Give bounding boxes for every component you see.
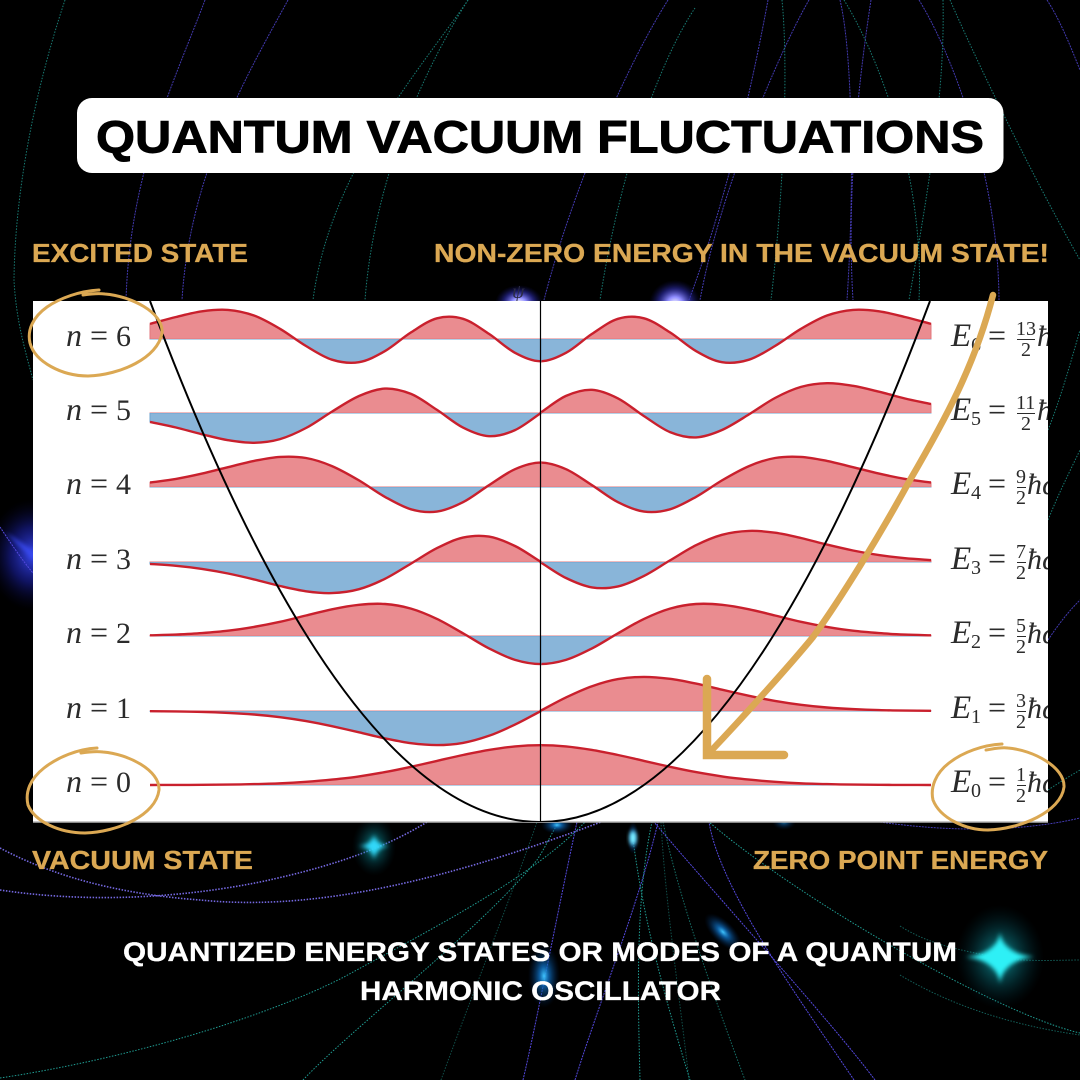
label: non-zero energy: NON-ZERO ENERGY IN THE VACUUM STATE! xyxy=(434,238,1049,268)
energy labels right: ħω xyxy=(1027,766,1063,799)
energy labels right: = xyxy=(988,391,1006,427)
energy labels right: = xyxy=(988,540,1006,576)
level labels left: n xyxy=(66,317,82,353)
level labels left: = xyxy=(90,540,108,576)
level labels left: 4 xyxy=(116,468,131,501)
energy labels right: 11 xyxy=(1016,392,1035,414)
level labels left: = xyxy=(90,763,108,799)
level labels left: n xyxy=(66,465,82,501)
energy labels right: 1 xyxy=(971,706,981,728)
hand-drawn circle: n=0 xyxy=(27,748,159,833)
level labels left: = xyxy=(90,689,108,725)
energy labels right: ħω xyxy=(1027,468,1063,501)
level labels left: = xyxy=(90,317,108,353)
energy labels right: E xyxy=(950,318,971,354)
energy labels right: 4 xyxy=(971,482,981,504)
energy labels right: 3 xyxy=(1016,690,1026,712)
energy labels right: 2 xyxy=(1021,413,1031,435)
energy labels right: 9 xyxy=(1016,466,1026,488)
label: excited state: EXCITED STATE xyxy=(32,238,248,268)
energy labels right: 6 xyxy=(971,334,981,356)
energy labels right: 2 xyxy=(1016,785,1026,807)
level labels left: 2 xyxy=(116,617,131,650)
chart: harmonic oscillator panel xyxy=(33,301,1073,822)
level labels left: 0 xyxy=(116,766,131,799)
level labels left: = xyxy=(90,391,108,427)
level labels left: n xyxy=(66,614,82,650)
level labels left: = xyxy=(90,465,108,501)
energy labels right: E xyxy=(950,392,971,428)
level labels left: n xyxy=(66,540,82,576)
level labels left: 3 xyxy=(116,543,131,576)
caption xyxy=(123,937,957,1006)
center axis xyxy=(540,301,542,822)
energy labels right: E xyxy=(950,466,971,502)
small psi mark above chart: ψ xyxy=(512,281,525,303)
energy labels right: 2 xyxy=(1021,339,1031,361)
energy labels right: ħω xyxy=(1027,617,1063,650)
energy labels right: E xyxy=(950,690,971,726)
energy labels right: = xyxy=(988,689,1006,725)
label: vacuum state: VACUUM STATE xyxy=(32,845,253,875)
wave n=1 xyxy=(150,677,931,745)
energy labels right xyxy=(950,322,1048,802)
title xyxy=(77,98,1004,173)
energy labels right: 2 xyxy=(1016,711,1026,733)
level labels left: = xyxy=(90,614,108,650)
wave n=0 xyxy=(150,745,931,785)
energy labels right: 3 xyxy=(971,557,981,579)
energy labels right: E xyxy=(950,764,971,800)
arrow: from non-zero energy to zero point xyxy=(707,295,993,755)
energy labels right: = xyxy=(988,614,1006,650)
wave n=6 xyxy=(150,310,931,363)
level labels left: n xyxy=(66,689,82,725)
energy labels right: 0 xyxy=(971,780,981,802)
energy labels right: 1 xyxy=(1016,764,1026,786)
hand-drawn circle: n=6 xyxy=(29,290,162,376)
wave n=3 xyxy=(150,531,931,593)
energy labels right: = xyxy=(988,763,1006,799)
energy labels right: 13 xyxy=(1016,318,1036,340)
energy labels right: 5 xyxy=(1016,615,1026,637)
energy labels right: E xyxy=(950,615,971,651)
potential parabola xyxy=(150,301,930,822)
caption: QUANTIZED ENERGY STATES OR MODES OF A QUANTUM xyxy=(123,937,957,967)
energy labels right: ħω xyxy=(1037,394,1073,427)
energy labels right: 7 xyxy=(1016,541,1026,563)
level labels left: 5 xyxy=(116,394,131,427)
level labels left: n xyxy=(66,763,82,799)
level labels left: 1 xyxy=(116,692,131,725)
energy labels right: 2 xyxy=(1016,636,1026,658)
energy labels right: 2 xyxy=(1016,487,1026,509)
energy labels right: = xyxy=(988,317,1006,353)
energy labels right: ħω xyxy=(1027,543,1063,576)
wave n=2 xyxy=(150,604,931,664)
wave n=5 xyxy=(150,383,931,443)
energy labels right: E xyxy=(950,541,971,577)
level labels left xyxy=(66,317,131,799)
caption: HARMONIC OSCILLATOR xyxy=(360,976,721,1006)
energy labels right: ħω xyxy=(1027,692,1063,725)
hand-drawn circle: E0 xyxy=(932,744,1064,830)
label: zero point energy: ZERO POINT ENERGY xyxy=(753,845,1048,875)
level labels left: 6 xyxy=(116,320,131,353)
energy labels right: 2 xyxy=(971,631,981,653)
energy labels right: = xyxy=(988,465,1006,501)
energy labels right: ħω xyxy=(1037,320,1073,353)
energy labels right: 2 xyxy=(1016,562,1026,584)
energy labels right: 5 xyxy=(971,408,981,430)
level labels left: n xyxy=(66,391,82,427)
wave n=4 xyxy=(150,457,931,512)
title: QUANTUM VACUUM FLUCTUATIONS xyxy=(96,112,984,162)
